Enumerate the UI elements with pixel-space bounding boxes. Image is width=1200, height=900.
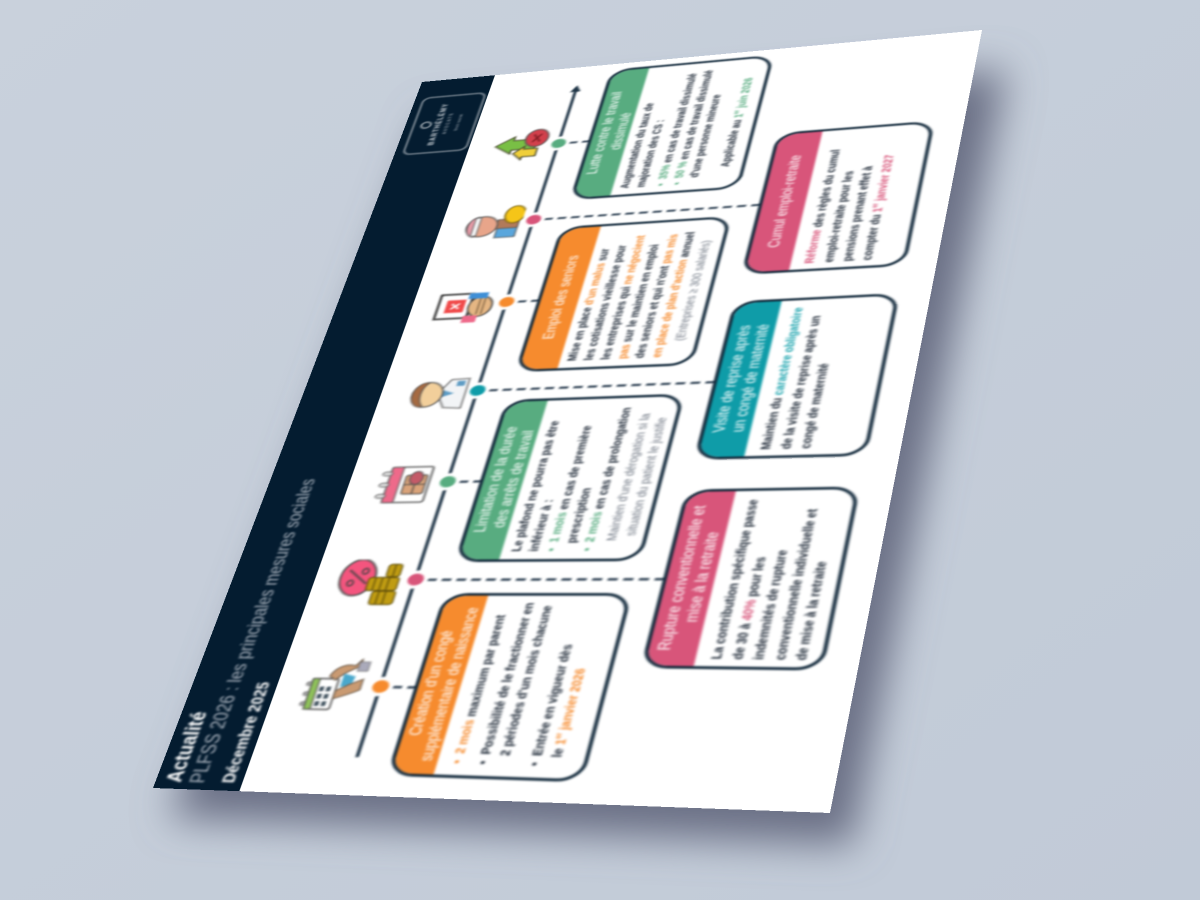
title block: Décembre 2025 xyxy=(218,682,274,783)
card body: congé de maternité xyxy=(798,363,832,449)
card heading: Lutte contre le travail xyxy=(582,91,625,175)
card heading xyxy=(698,301,782,457)
card heading: Cumul emploi-retraite xyxy=(764,154,805,248)
card heading xyxy=(391,596,488,774)
logo: BARTHÉLÉMY xyxy=(426,103,451,146)
card body: Réforme des règles du cumul xyxy=(802,149,843,264)
card body: de la visite de reprise après un xyxy=(778,315,824,449)
card: emploi des seniors xyxy=(515,216,732,372)
card heading: Création d'un congé xyxy=(405,630,456,736)
logo: AVOCATS xyxy=(442,112,455,134)
logo xyxy=(402,92,487,155)
card body: La contribution spécifique passe xyxy=(708,499,762,659)
card: rupture conventionnelle xyxy=(640,486,860,671)
card body: inférieur à : xyxy=(526,499,556,552)
card body: • Possibilité de le fractionner en xyxy=(475,603,538,765)
icon: calendar and hands xyxy=(298,658,373,712)
card body: Applicable au 1er juin 2026 xyxy=(718,77,756,167)
card body: les cotisations vieillesse pour xyxy=(581,245,630,361)
card body xyxy=(565,231,714,362)
card heading: Limitation de la durée xyxy=(469,426,520,533)
icon: calendar with patient xyxy=(373,464,436,505)
card heading: Rupture conventionnelle et xyxy=(653,505,709,651)
card body: situation du patient le justifie xyxy=(623,417,670,536)
card body: • 2 mois maximum par parent xyxy=(449,615,509,764)
card heading xyxy=(573,68,649,198)
card body: emploi-retraite pour les xyxy=(821,171,856,263)
card body: (Entreprises ≥ 300 salariés) xyxy=(672,240,714,341)
card body xyxy=(619,70,756,189)
card body xyxy=(449,602,589,768)
card body xyxy=(708,498,830,662)
card: limitation arrêts xyxy=(454,394,685,562)
card body xyxy=(509,406,670,552)
icon: worker with coin xyxy=(464,204,528,240)
card body: compter du 1er janvier 2027 xyxy=(859,154,897,261)
card: cumul emploi-retraite xyxy=(741,121,935,275)
card heading xyxy=(459,401,548,560)
card: création congé xyxy=(386,593,632,782)
slide xyxy=(153,30,982,813)
card heading: Emploi des seniors xyxy=(539,255,582,340)
header band xyxy=(153,75,495,791)
card body: conventionnelle individuelle et xyxy=(771,509,821,660)
card heading: Visite de reprise après xyxy=(708,325,754,433)
icon: arrows and red badge xyxy=(493,128,552,162)
card heading xyxy=(519,226,601,370)
icon: percent and coins xyxy=(336,558,406,606)
card heading: dissimulé xyxy=(606,112,634,151)
card body: des seniors et qui n'ont pas mis xyxy=(632,234,681,359)
card heading: des arrêts de travail xyxy=(489,430,537,528)
card heading xyxy=(645,491,736,666)
card body: • 35% en cas de travail dissimulé xyxy=(655,73,700,186)
card body: Le plafond ne pourra pas être xyxy=(509,421,563,552)
card body: pas sur le maintien en emploi xyxy=(615,244,662,359)
card heading: un congé de maternité xyxy=(727,324,772,432)
card body xyxy=(802,148,897,264)
card: visite de reprise xyxy=(694,293,900,460)
card body: • Entrée en vigueur dès xyxy=(526,644,576,766)
card body: en place de plan d'action annuel xyxy=(649,231,698,358)
card heading: mise à la retraite xyxy=(680,532,722,622)
card heading: supplémentaire de naissance xyxy=(416,607,481,761)
timeline line and connectors xyxy=(354,84,761,759)
card body xyxy=(758,306,832,450)
icon: worker with cross xyxy=(430,291,495,324)
card body: pensions prenant effet à xyxy=(840,166,876,262)
title block: Actualité xyxy=(162,711,212,783)
card body: • 1 mois en cas de première xyxy=(544,425,595,551)
card body: 2 périodes d'un mois chacune xyxy=(497,606,556,756)
card body: le 1er janvier 2026 xyxy=(549,668,589,758)
card body: les entreprises qui ne négocient xyxy=(598,235,648,360)
card body: Maintien du caractère obligatoire xyxy=(758,307,807,450)
title block: PLFSS 2026 : les principales mesures sociales xyxy=(185,479,319,784)
card body: Mise en place d'un malus sur xyxy=(565,248,613,361)
card body: majoration des CS : xyxy=(634,119,667,188)
card body: de 30 à 40% pour les xyxy=(729,557,769,660)
timeline dots xyxy=(370,136,572,698)
card body: • 2 mois en cas de prolongation xyxy=(579,407,635,551)
logo: Droit social xyxy=(454,114,464,131)
card: lutte travail dissimulé xyxy=(569,55,774,200)
icon: doctor xyxy=(408,376,472,410)
card body: prescription xyxy=(564,488,595,543)
card heading xyxy=(745,131,823,272)
card body: d'une personne mineure xyxy=(688,94,724,178)
card body: Augmentation du taux de xyxy=(619,102,657,189)
card body: • 50 % en cas de travail dissimulé xyxy=(670,70,716,185)
card body: indemnités de rupture xyxy=(750,550,791,660)
card body: Maintien d'une dérogation si la xyxy=(604,413,654,541)
card body: de mise à la retraite xyxy=(793,561,830,660)
